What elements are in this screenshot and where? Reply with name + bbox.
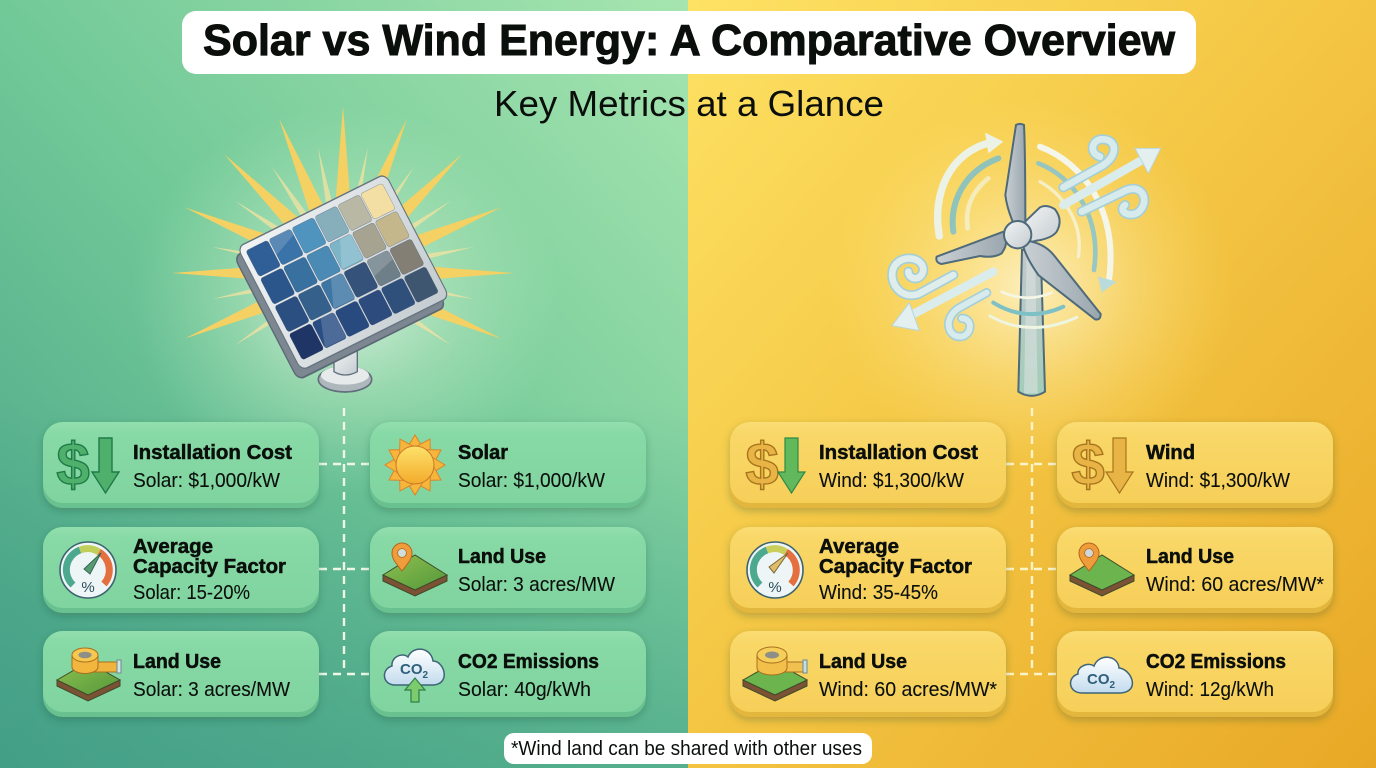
icon: co2 cloud with up arrow: 2 <box>422 670 428 681</box>
heading: Average <box>819 536 899 558</box>
value: Solar: $1,000/kW <box>133 470 280 492</box>
card: wind capacity factor <box>730 527 1006 613</box>
connector: solar side dashed lines <box>319 408 370 674</box>
icon: co2 cloud: CO <box>1087 671 1110 688</box>
illustration: solar panel with sun rays <box>172 106 514 392</box>
card: wind installation cost <box>730 422 1006 508</box>
icon: co2 cloud with up arrow: CO <box>400 661 422 678</box>
value: Wind: 60 acres/MW* <box>1146 574 1324 596</box>
value: Solar: 15-20% <box>133 582 250 604</box>
value: Solar: 3 acres/MW <box>133 679 290 701</box>
value: Wind: $1,300/kW <box>819 470 964 492</box>
value: Solar: 3 acres/MW <box>458 574 615 596</box>
subtitle: Key Metrics at a Glance <box>494 83 884 124</box>
icon: gauge: % <box>81 579 95 596</box>
icon: land with map pin <box>383 543 447 596</box>
heading: Land Use <box>133 651 221 673</box>
value: Wind: 60 acres/MW* <box>819 679 997 701</box>
card: solar land use with pin <box>370 527 646 613</box>
icon: sun <box>385 435 445 495</box>
connector: wind side dashed lines <box>1006 408 1057 674</box>
heading: Land Use <box>458 546 546 568</box>
heading: CO2 Emissions <box>458 651 599 673</box>
card: wind land use with tape <box>730 631 1006 717</box>
card: wind summary <box>1057 422 1333 508</box>
icon: land with map pin <box>1070 543 1134 596</box>
icon: gold dollar and gold arrow <box>1071 431 1133 498</box>
icon: gauge: % <box>768 579 782 596</box>
title banner: Solar vs Wind Energy: A Comparative Overview <box>203 16 1176 65</box>
heading: Solar <box>458 442 508 464</box>
heading line two: Capacity Factor <box>819 556 972 578</box>
value: Wind: 35-45% <box>819 582 938 604</box>
value: Solar: $1,000/kW <box>458 470 605 492</box>
icon: dollar and down arrow: $ <box>56 431 90 498</box>
icon: land with measuring tape <box>743 647 807 701</box>
heading: Installation Cost <box>133 442 292 464</box>
icon: co2 cloud <box>1071 657 1132 693</box>
icon: gold dollar and green arrow: $ <box>745 431 779 498</box>
card: solar summary <box>370 422 646 508</box>
value: Wind: 12g/kWh <box>1146 679 1274 701</box>
icon: co2 cloud with up arrow <box>384 649 444 702</box>
icon: co2 cloud: 2 <box>1110 680 1116 691</box>
value: Solar: 40g/kWh <box>458 679 591 701</box>
icon: gold dollar and green arrow <box>745 431 805 498</box>
value: Wind: $1,300/kW <box>1146 470 1290 492</box>
background: wind side <box>688 0 1376 768</box>
heading: Land Use <box>819 651 907 673</box>
icon: dollar and down arrow <box>56 431 119 498</box>
footnote <box>504 733 872 764</box>
card: solar land use with tape <box>43 631 319 717</box>
illustration: wind turbine with wind swirls <box>892 124 1161 396</box>
solar glow <box>130 105 560 495</box>
card: solar co2 emissions <box>370 631 646 717</box>
footnote: *Wind land can be shared with other uses <box>511 738 862 760</box>
icon: land with measuring tape <box>57 648 121 701</box>
background: solar lower shade <box>0 400 688 768</box>
card: wind land use with pin <box>1057 527 1333 613</box>
icon: gauge <box>747 542 803 598</box>
heading: Wind <box>1146 442 1195 464</box>
heading: Land Use <box>1146 546 1234 568</box>
card: wind co2 emissions <box>1057 631 1333 717</box>
heading: Installation Cost <box>819 442 978 464</box>
wind glow <box>825 95 1235 475</box>
heading line two: Capacity Factor <box>133 556 286 578</box>
icon: gauge <box>60 542 116 598</box>
card: solar installation cost <box>43 422 319 508</box>
heading: CO2 Emissions <box>1146 651 1286 673</box>
heading: Average <box>133 536 213 558</box>
background: solar side <box>0 0 688 768</box>
icon: gold dollar and gold arrow: $ <box>1071 431 1105 498</box>
card: solar capacity factor <box>43 527 319 613</box>
